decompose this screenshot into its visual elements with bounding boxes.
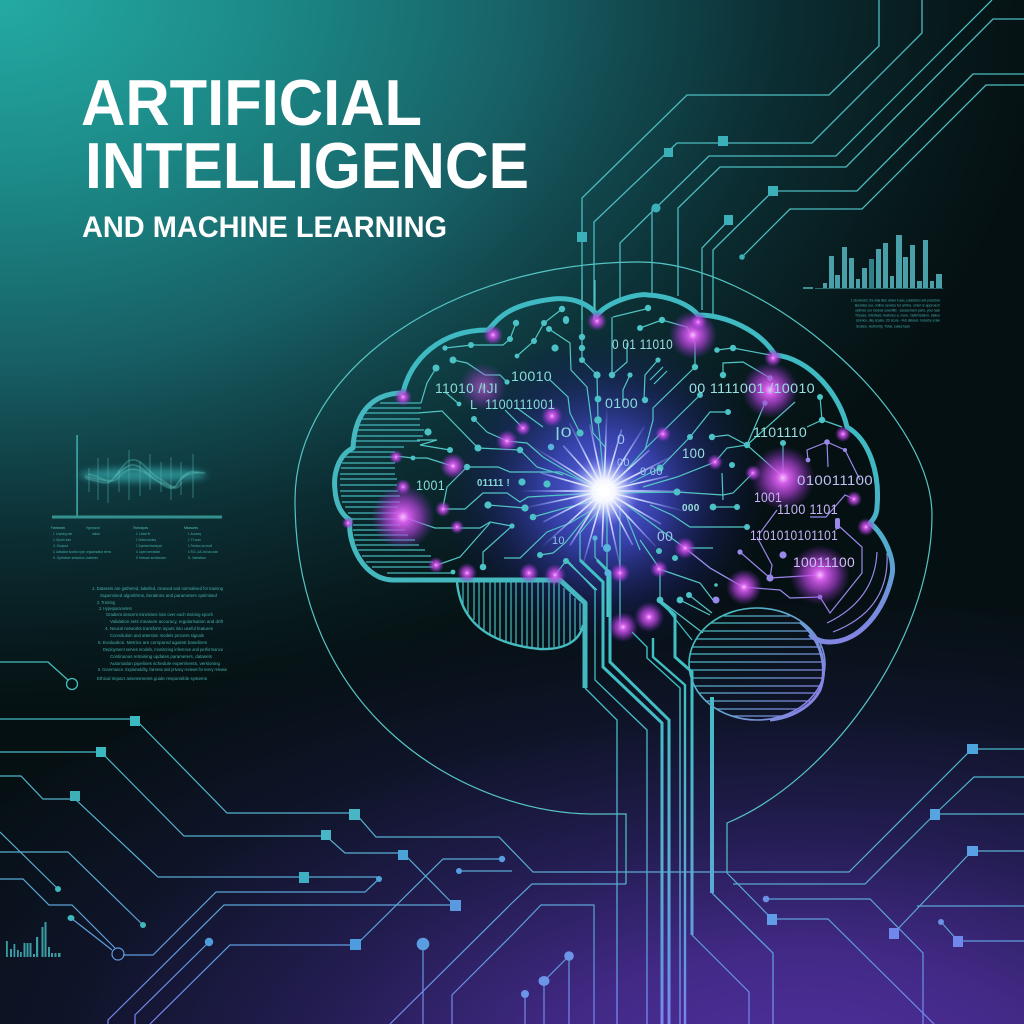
caption: top right: Besides our, online service for all the, order is approach (855, 302, 940, 308)
data table: left: Framework (51, 526, 65, 530)
binary text: right hemisphere: 1100 1101 (777, 501, 838, 517)
binary text: left hemisphere: 01111 ! (477, 478, 510, 489)
binary text: right hemisphere: 1101010101101 (750, 527, 838, 543)
brain: circuit traces centre right (609, 305, 842, 633)
brain outline: left side and stem (335, 393, 585, 688)
waveform chart: left (52, 435, 222, 518)
binary text: right hemisphere: 000 (682, 503, 700, 514)
data table: left: 4. Activation function type, regularisation terms (53, 550, 111, 554)
binary text: right hemisphere: 010011100 (797, 472, 873, 488)
circuit traces: bottom left (0, 716, 1024, 1024)
title line 1: ARTIFICIAL (81, 66, 422, 139)
paragraph: left: 1. Datasets are gathered, labelled, cleaned and normalised for training (92, 586, 223, 591)
central blue glow (439, 326, 769, 656)
brain: purple circuit traces right (685, 439, 887, 632)
binary text: left hemisphere: 10010 (511, 368, 552, 384)
brain: left hatching (340, 403, 452, 573)
data table: left: Techniques (133, 526, 148, 530)
nodes: centre right (609, 305, 825, 603)
title (81, 66, 529, 244)
caption: top right (851, 298, 941, 328)
caption: top right: optimal. our module scientific - assessment parts, your task (855, 308, 940, 312)
data table: left: 3. Supervised learning set (136, 544, 162, 548)
data table: left: Hyperparam (86, 526, 100, 530)
caption: top right: Scales. Authority. Total, sales task (856, 324, 910, 328)
binary text: right hemisphere: 0 (617, 431, 625, 447)
circuit traces: bottom right (521, 744, 1024, 1024)
cerebellum with horizontal hatching (689, 608, 825, 720)
binary text: left hemisphere (416, 368, 638, 547)
large thin circle around brain (295, 262, 932, 884)
nodes: top right (577, 136, 778, 260)
paragraph: left (92, 586, 227, 681)
nodes: bottom left (55, 716, 505, 950)
paragraph: left: Automation pipelines schedule experiments, versioning (110, 661, 220, 666)
binary text: left hemisphere: 0100 (605, 395, 638, 411)
circuit trace with hollow node: left (0, 662, 78, 690)
caption: top right: Theses. Interface: features a, none, Optimization, status (855, 312, 940, 318)
circuit traces: top right (577, 0, 1024, 320)
paragraph: left: Validation sets measure accuracy, regularisation and drift (110, 619, 224, 624)
binary text: left hemisphere: 1001 (416, 477, 445, 493)
binary text: left hemisphere: 10 (552, 535, 565, 547)
magenta neuron glows (342, 311, 875, 642)
subtitle: AND MACHINE LEARNING (82, 211, 447, 244)
binary text: right hemisphere: 10011100 (793, 554, 855, 570)
data table: left: 3. Precision and recall (188, 544, 212, 548)
data table: left: 3. Dropout (53, 544, 68, 548)
data table: left: 1. Accuracy (188, 532, 201, 536)
paragraph: left: Gradient descent minimises loss over each training epoch (106, 612, 213, 617)
paragraph: left: Supervised algorithms, iterations and parameters optimised (100, 593, 217, 598)
binary text: right hemisphere: 0 00 (640, 466, 663, 478)
nodes: left hemisphere (411, 306, 612, 577)
nodes: bottom right (521, 744, 978, 998)
bar chart: top right (803, 235, 943, 289)
nodes: purple (712, 439, 847, 604)
title line 2: INTELLIGENCE (85, 129, 529, 202)
binary text: right hemisphere: 00 1111001 /10010 (689, 380, 815, 396)
stem traces below brain (567, 560, 773, 1024)
paragraph: left: 5. Evaluation. Metrics are compared against baselines (98, 640, 208, 645)
data table: left: 5. Variation (188, 556, 206, 560)
data table: left (51, 526, 218, 560)
caption: top right: 1 Summarch. the data field, where it was, predictions and prediction (851, 298, 940, 302)
brain: circuit traces left (395, 280, 612, 617)
central starburst (519, 406, 689, 574)
data table: left: 2. F1 score (188, 538, 201, 542)
caption: top right: science, day scales. 2D score - Full dataset, Industry scale (856, 318, 941, 322)
data table: left: Measures (184, 526, 198, 530)
binary text: right hemisphere: 1001 (754, 489, 782, 505)
data table: left: 5. Network architecture (136, 556, 166, 560)
bar chart: bottom left (6, 922, 60, 957)
brain outline (403, 295, 893, 642)
binary text: left hemisphere: 11010 /IJI (435, 380, 498, 396)
data table: left: 2. Epoch size (53, 538, 71, 542)
paragraph: left: 2. Training (97, 600, 115, 605)
data table: left: 5. Optimiser selection, batches (53, 556, 98, 560)
paragraph: left: 6. Governance. Explainability, fairness and privacy reviews for every release (98, 667, 227, 672)
binary text: right hemisphere (612, 336, 873, 570)
paragraph: left: Continuous retraining updates parameters, datasets (110, 654, 213, 659)
binary text: left hemisphere: |0 (555, 424, 572, 440)
paragraph: left: Ethical impact assessments guide responsible systems (97, 676, 208, 681)
binary text: right hemisphere: 00 (657, 528, 673, 544)
data table: left: value (92, 532, 100, 536)
data table: left: 4. ROC, AUC and loss value (188, 550, 218, 554)
binary text: right hemisphere: 0 01 11010 (612, 336, 673, 352)
paragraph: left: Convolution and attention models process signals (110, 633, 205, 638)
binary text: left hemisphere: 1100111001 (485, 396, 555, 412)
data table: left: 1. Linear fit (136, 532, 150, 536)
temporal lobe with vertical hatching (457, 581, 583, 649)
binary text: right hemisphere: 00 (617, 457, 630, 469)
paragraph: left: Deployment serves models, monitoring inference and performance (103, 647, 223, 652)
binary text: right hemisphere: 1101110 (753, 424, 807, 440)
data table: left: 2. Decision boundary (136, 538, 156, 542)
paragraph: left: 3. Hyperparameters (99, 606, 133, 611)
data table: left: 1. Learning rate (53, 532, 72, 536)
binary text: left hemisphere: L (470, 397, 478, 412)
binary text: right hemisphere: 100 (682, 445, 705, 461)
paragraph: left: 4. Neural networks transform inputs into useful features (105, 626, 214, 631)
data table: left: 4. Layer normalised (136, 550, 160, 554)
